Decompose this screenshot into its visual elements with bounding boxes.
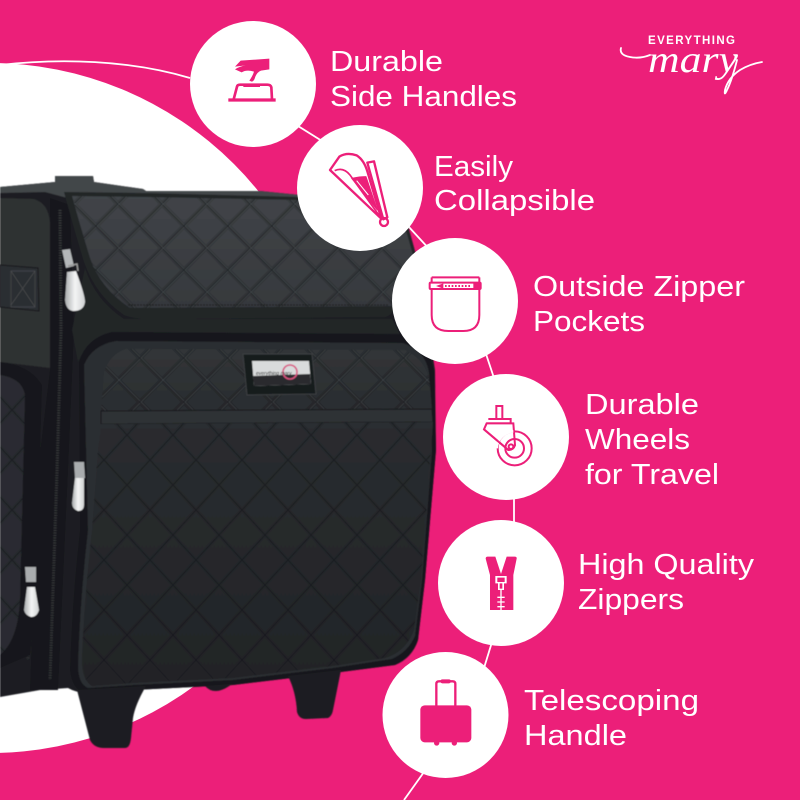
icon: collapsed case (330, 154, 388, 226)
label: easily collapsible (434, 151, 595, 217)
label: telescoping handle: Handle (524, 720, 627, 752)
icon circle: zippers (438, 520, 564, 646)
label: easily collapsible: Collapsible (434, 185, 595, 217)
icon circle: telescoping handle (382, 652, 508, 778)
logo: everything mary: EVERYTHING (648, 35, 735, 47)
label: durable side handles (330, 46, 517, 113)
left wheel foot (77, 686, 146, 748)
pocket seam (101, 409, 433, 424)
suitcase (0, 176, 436, 748)
label: easily collapsible: Easily (434, 151, 514, 183)
brand badge: everything mary (256, 371, 292, 377)
icon circle: side handles (190, 21, 316, 147)
upper quilted panel (101, 349, 432, 411)
side zipper (28, 198, 74, 690)
icon circle: wheels (443, 374, 569, 500)
label: outside zipper pockets (533, 271, 745, 338)
icon: pocket (430, 277, 481, 331)
logo: everything mary (621, 35, 762, 94)
label: durable wheels for travel: for Travel (585, 459, 719, 491)
icon: zipper (486, 557, 517, 610)
icon: trolley case (420, 679, 471, 746)
icon: caster wheel (484, 406, 532, 465)
center foot (205, 684, 232, 691)
zipper pull: top (62, 249, 85, 311)
bag silhouette (0, 176, 436, 697)
left side panel (0, 198, 50, 368)
connector line (0, 61, 514, 800)
label: high quality zippers: Zippers (578, 584, 684, 616)
label: durable side handles: Durable (330, 46, 443, 78)
front pocket (70, 332, 436, 693)
label: durable wheels for travel: Durable (585, 389, 699, 421)
large white circle (0, 63, 335, 753)
right wheel foot (288, 670, 341, 719)
label: outside zipper pockets: Pockets (533, 306, 645, 338)
zipper pull: middle (72, 462, 85, 511)
side loop handle (0, 265, 39, 311)
label: durable side handles: Side Handles (330, 81, 517, 113)
label: high quality zippers (578, 549, 755, 616)
label: telescoping handle: Telescoping (524, 685, 699, 717)
flap gusset (72, 268, 400, 362)
left pocket (0, 362, 42, 668)
zipper pull: lower (24, 567, 39, 617)
brand badge (243, 354, 316, 395)
icon circle: collapsible (297, 125, 423, 251)
lid flap (64, 192, 416, 319)
label: outside zipper pockets: Outside Zipper (533, 271, 745, 303)
label: high quality zippers: High Quality (578, 549, 755, 581)
top panel (0, 176, 400, 222)
lower quilted panel (82, 422, 433, 686)
label: telescoping handle (524, 685, 699, 752)
icon circle: zipper pockets (392, 238, 518, 364)
icon: handle (228, 59, 276, 100)
label: durable wheels for travel (585, 389, 719, 491)
logo: everything mary: mary (648, 39, 738, 81)
label: durable wheels for travel: Wheels (585, 424, 690, 456)
